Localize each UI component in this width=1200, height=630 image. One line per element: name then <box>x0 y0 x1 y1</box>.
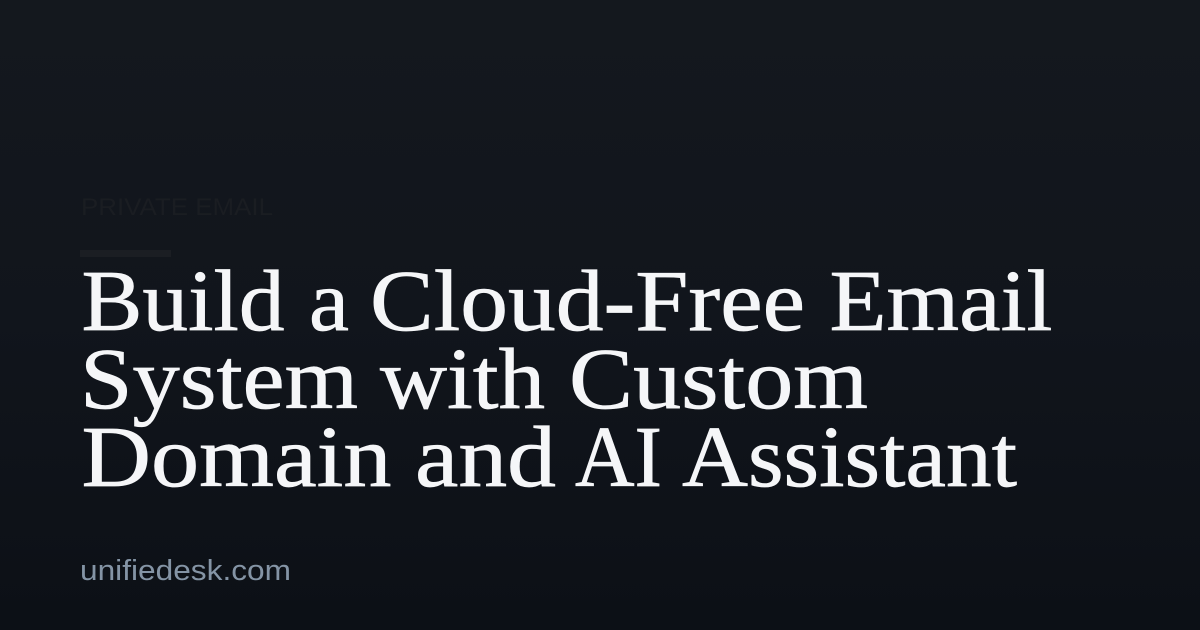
site domain: unifiedesk.com <box>80 555 291 587</box>
title: Email <box>830 252 1052 349</box>
title <box>80 252 1052 505</box>
title: a <box>309 252 349 349</box>
title: and <box>415 408 556 505</box>
title: System <box>80 330 358 427</box>
title: Domain <box>82 408 392 505</box>
title: Custom <box>569 330 868 427</box>
title: AI <box>575 408 662 505</box>
title: with <box>380 330 545 427</box>
accent bar <box>80 250 171 257</box>
title: Build <box>82 252 284 349</box>
title: Cloud-Free <box>370 252 805 349</box>
category label: PRIVATE EMAIL <box>81 194 273 221</box>
title: Assistant <box>682 408 1017 505</box>
